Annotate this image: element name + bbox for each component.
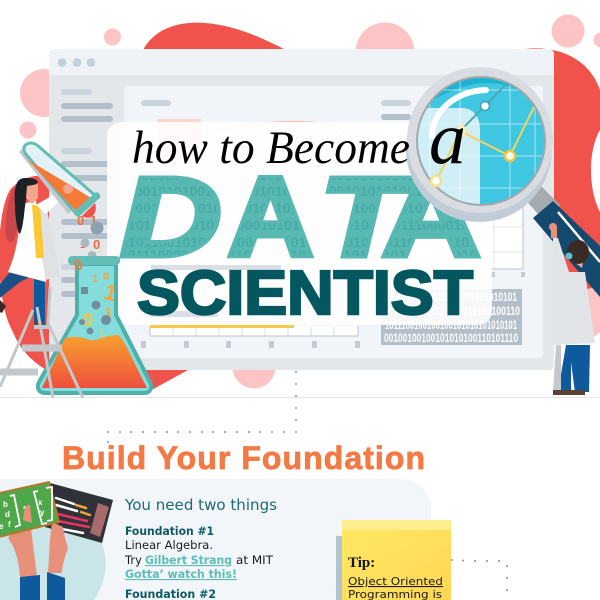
data bubbles: [80, 222, 104, 259]
falling digits: 0: [77, 213, 84, 228]
title: DATA: 11101010110101010110101010110101010101011010101: [120, 167, 485, 183]
binary data box: [381, 289, 522, 345]
flask digits: 0: [72, 256, 85, 275]
binary data box: 0110101001010101010101100110: [386, 304, 520, 318]
dotted connector right: [451, 559, 508, 591]
green matrix card: x: [38, 498, 43, 507]
panel chart grid: [380, 127, 525, 277]
title: how to Become a: how to Become: [132, 122, 410, 174]
dark code card: [45, 483, 113, 543]
title: DATA: T: [320, 154, 413, 280]
text block: foundation copy: You need two things: [124, 496, 277, 514]
scientist man: [549, 223, 595, 395]
title: SCIENTIST: SCIENTIST: [137, 259, 473, 328]
flask digits: 1: [92, 273, 98, 285]
flask digits: [72, 256, 120, 339]
text block: foundation copy: [124, 496, 277, 600]
falling digits: 1: [80, 240, 85, 250]
heading: Build Your Foundation: Build Your Foundation: [62, 440, 425, 476]
illustration: hands holding cards: [0, 482, 113, 600]
title: DATA: 10111000010100110100101011100101001010100010101: [120, 247, 485, 263]
magnifier handle: [533, 201, 600, 297]
binary data box: 1001010010010101001001010101: [386, 290, 517, 304]
ladder: [0, 287, 83, 398]
floor line: [0, 397, 600, 398]
green matrix card: d: [5, 510, 10, 519]
flask digits: 0: [103, 271, 109, 283]
falling digits: [77, 213, 100, 252]
magnifying glass: [400, 67, 600, 297]
text block: foundation copy: Try: [124, 553, 142, 567]
green matrix card: [0, 482, 59, 538]
title: how to Become a: [132, 98, 466, 180]
sticky note: tip: Object Oriented: [348, 575, 443, 588]
title: DATA: D: [121, 154, 221, 280]
title: DATA: 11001010100110101010100101100101010100101010101: [120, 183, 485, 199]
sleeves: [20, 575, 40, 600]
text block: foundation copy: Foundation #1: [125, 524, 214, 538]
background red and pink blobs: [0, 14, 600, 392]
faded panel behind title: [107, 119, 492, 325]
flask digits: 1: [104, 304, 112, 320]
text block: foundation copy: Gilbert Strang: [145, 553, 232, 567]
title: how to Become a: a: [429, 98, 466, 180]
dotted connector top: [107, 371, 297, 443]
green matrix card: y: [40, 508, 45, 517]
flask: [38, 256, 151, 393]
text block: foundation copy: Linear Algebra.: [125, 538, 213, 552]
title: DATA: 01010100101011000010101011101010101011100001010: [120, 217, 485, 233]
title: DATA: A: [228, 154, 313, 280]
flask digits: 1: [101, 279, 120, 306]
text block: foundation copy: at MIT: [236, 553, 274, 567]
sticky note: tip: [336, 520, 451, 600]
scientist woman: [0, 178, 65, 326]
flask digits: 1: [99, 329, 104, 339]
green matrix card: b: [3, 500, 8, 509]
panel: foundation: [0, 479, 431, 600]
falling digits: 1: [90, 213, 97, 228]
text block: foundation copy: Gotta’ watch this!: [125, 567, 237, 581]
test tube: [19, 143, 102, 218]
arms: [8, 520, 37, 577]
sticky note: tip: Tip:: [348, 555, 375, 571]
title: DATA: 01011001010101100101110101011010100110010111010: [120, 234, 485, 250]
sidebar lines: [61, 89, 113, 297]
timeline bar: [141, 325, 360, 348]
falling digits: 0: [93, 237, 100, 252]
title: DATA: 10001010100100100101101000101010010101010010100: [120, 200, 485, 216]
title: DATA: [119, 175, 482, 258]
green matrix card: f: [8, 520, 11, 529]
green matrix card: *: [23, 505, 27, 514]
binary data box: 00100100100101010100110101110: [384, 331, 518, 345]
binary data box: 1011100100100100101010101010101: [385, 318, 517, 332]
browser window: [49, 49, 554, 370]
title: DATA: A: [382, 154, 480, 280]
flask digits: 0: [83, 310, 93, 330]
